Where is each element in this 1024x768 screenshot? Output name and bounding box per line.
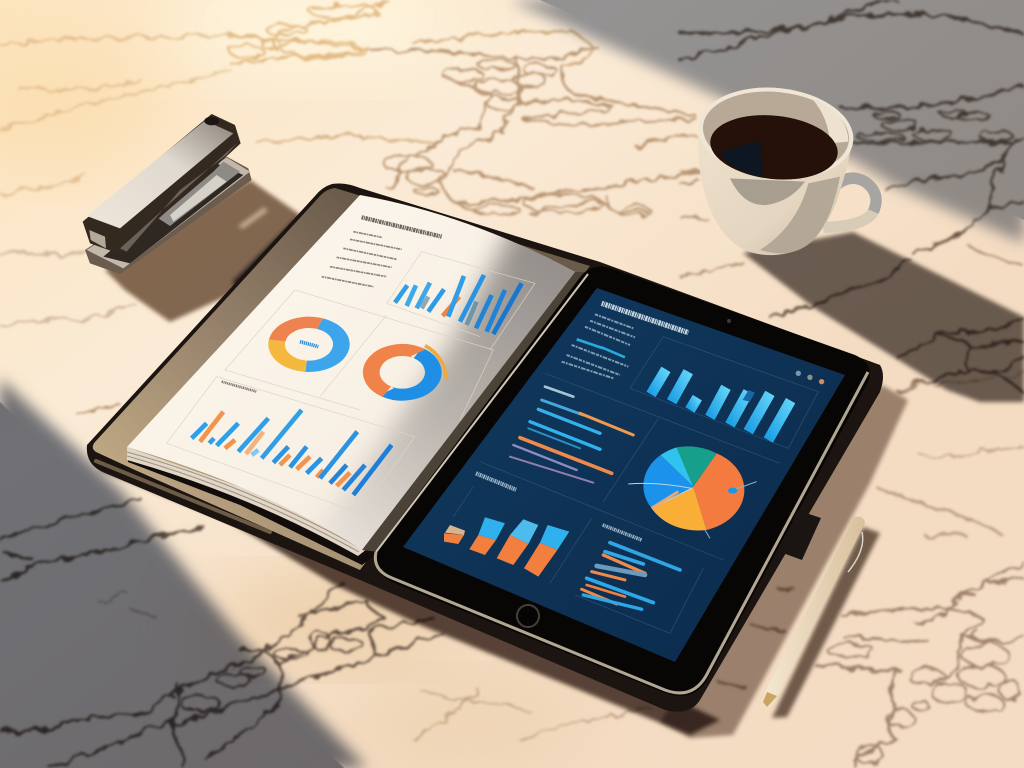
spine edge (362, 272, 590, 552)
wall-light shadow: top right (510, 0, 1024, 243)
pen cast shadow (772, 527, 880, 718)
bottom right bars chart (582, 543, 680, 609)
folder bottom lip (96, 461, 270, 532)
stapler cast shadow (105, 180, 315, 322)
cup handle (823, 178, 876, 227)
screen text lines (562, 314, 635, 378)
donut chart right (360, 342, 447, 403)
tight shadow below folder (100, 450, 720, 735)
cup shaded area (730, 178, 805, 205)
stapler spring (158, 162, 240, 226)
wall-light shadow: lower left (0, 378, 367, 768)
stapler base (85, 157, 252, 274)
veins: top centre network (230, 0, 697, 215)
veins: top right and cup shadow network (680, 0, 1024, 393)
notebook body text lines (322, 232, 402, 287)
veins: lower left network (0, 405, 479, 768)
pen (763, 517, 865, 707)
bar chart axis marks (796, 371, 824, 384)
page stack (127, 447, 372, 556)
donut center label placeholder (300, 342, 318, 347)
coffee surface (707, 109, 841, 186)
stapler (83, 114, 252, 274)
camera (727, 319, 731, 323)
home button (517, 605, 539, 627)
stapler arm (83, 114, 241, 254)
tablet screen (403, 288, 845, 662)
screen vertical bar chart (651, 369, 791, 440)
horizontal bars chart (510, 387, 633, 483)
veins: misc right side (420, 372, 1024, 740)
tablet strap (780, 510, 821, 560)
tablet (375, 266, 870, 696)
cup interior (699, 85, 853, 182)
screen heading placeholder (602, 303, 688, 333)
coffee cup (694, 80, 876, 255)
open notebook (127, 195, 585, 556)
tablet cast shadow (660, 385, 908, 738)
stacked bars chart (444, 517, 569, 577)
tablet metal edge (375, 372, 868, 693)
stacked chart heading placeholder (476, 473, 517, 490)
bottom right heading placeholder (603, 525, 642, 540)
black gap under pages (127, 450, 380, 565)
pie callouts (628, 483, 692, 508)
bar chart dark segment (743, 390, 755, 402)
notebook heading placeholder (362, 217, 442, 237)
cup rim (694, 80, 858, 187)
pie chart (628, 446, 757, 538)
notebook page frames (167, 252, 535, 513)
notebook page (127, 195, 575, 550)
page shadow (326, 233, 575, 550)
screen panel frames (453, 337, 818, 633)
screen cyan text highlight (577, 339, 625, 357)
bottom bar chart (192, 410, 392, 495)
veins: lower right network (717, 487, 1024, 767)
top bar chart (395, 275, 522, 334)
chart heading placeholder (222, 382, 257, 392)
veins: upper left (0, 35, 230, 325)
cup body (698, 137, 853, 255)
tablet body (375, 266, 870, 696)
donut chart left (268, 316, 350, 372)
folder: leather case (87, 184, 883, 712)
coffee cup cast shadow (743, 232, 1024, 402)
